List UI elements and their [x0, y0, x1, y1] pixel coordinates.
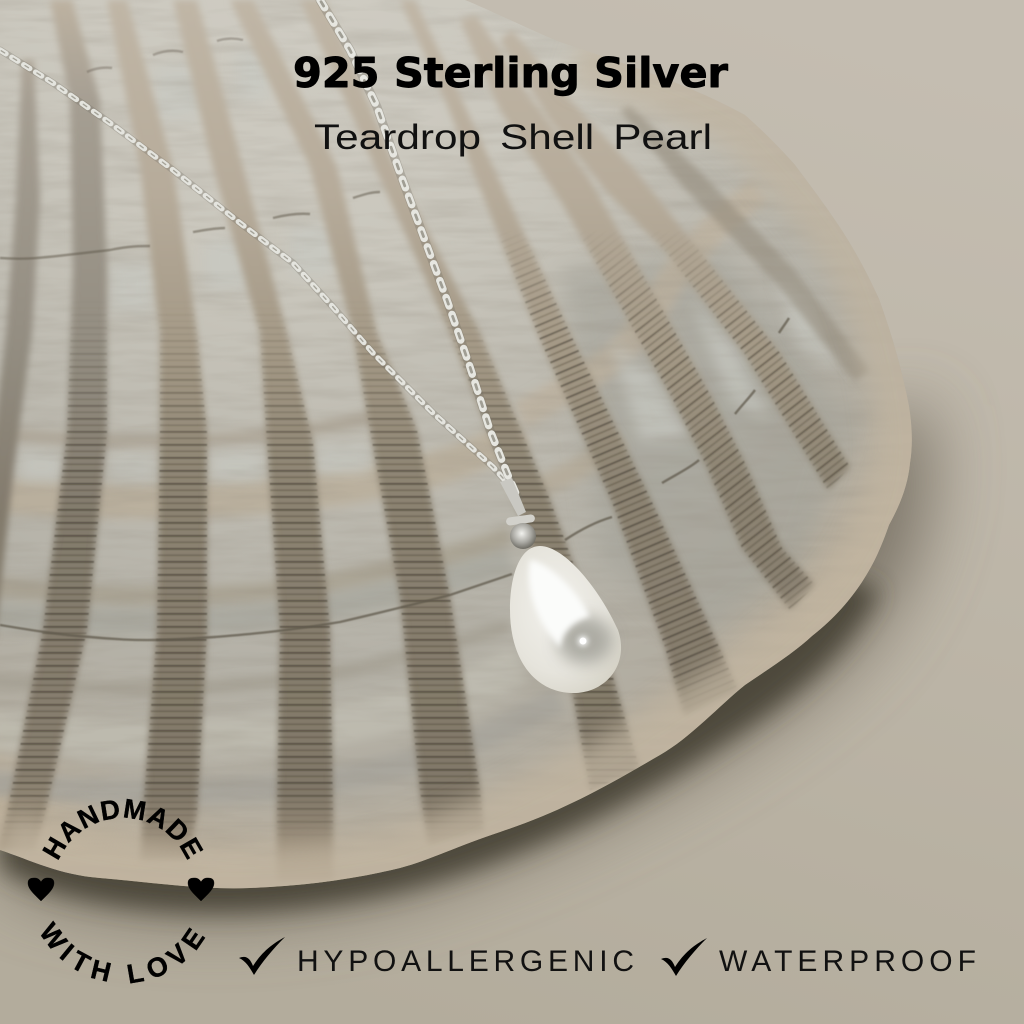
icon: check waterproof [661, 938, 707, 976]
title: 925 Sterling Silver [293, 49, 729, 97]
badge top text: HANDMADE [42, 798, 204, 860]
pendant connector and bead [500, 478, 536, 549]
right tan bands [520, 190, 760, 490]
feature: waterproof: WATERPROOF [719, 945, 976, 978]
icon: right heart [188, 878, 214, 901]
feature: hypoallergenic: HYPOALLERGENIC [297, 945, 634, 978]
rib grooves [0, 0, 870, 880]
badge bottom text: WITH LOVE [40, 920, 206, 984]
right groove striations [506, 245, 848, 690]
right ribs grey tone [562, 256, 834, 614]
shell soft outer shadow [0, 400, 933, 919]
outer rim [0, 48, 910, 884]
lower groove striations [5, 328, 636, 823]
pale rib caps [20, 292, 834, 482]
badge: handmade with love [28, 798, 214, 984]
subtitle: Teardrop Shell Pearl [314, 118, 712, 157]
teardrop pearl [510, 546, 621, 693]
chain: left strand [0, 50, 512, 488]
concentric growth ridges [0, 39, 789, 640]
icon: left heart [28, 878, 54, 901]
horizontal mottling [0, 0, 814, 751]
chain: right strand [320, 0, 518, 498]
shell contact shadow [0, 500, 880, 912]
icon: check hypoallergenic [239, 937, 285, 975]
left growth colour bands [0, 415, 560, 792]
